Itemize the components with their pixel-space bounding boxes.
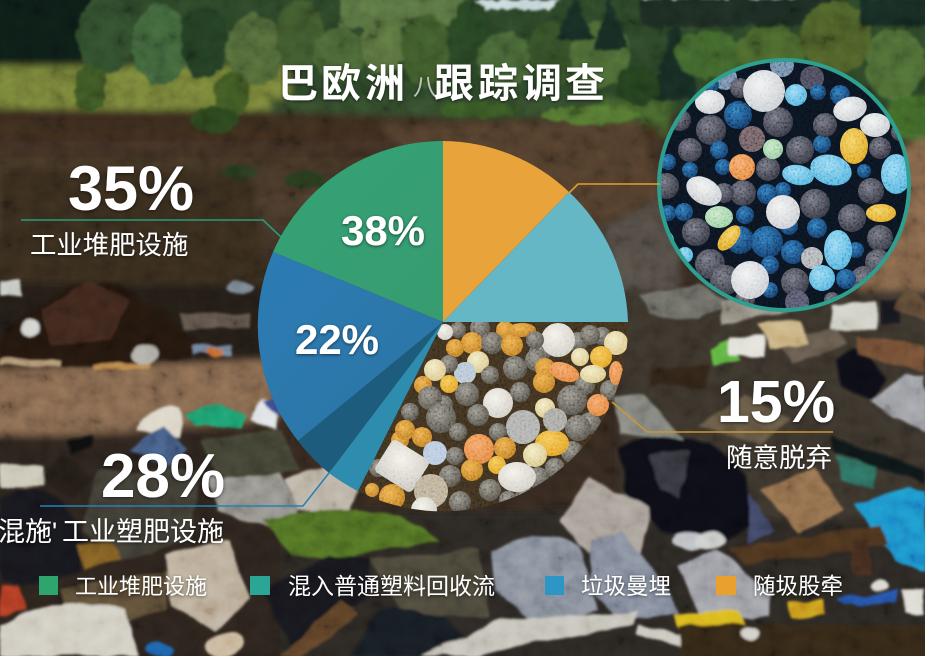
title: 巴欧洲跟踪调查 bbox=[278, 62, 605, 106]
callout: 35% industrial composting: 工业堆肥设施 bbox=[30, 230, 188, 260]
callout: 35% industrial composting: 35% bbox=[68, 154, 194, 224]
callout: 28% mixed facilities: 混施'工业塑肥设施 bbox=[0, 517, 224, 547]
pie label: 22%: 22% bbox=[295, 316, 379, 363]
pie chart bbox=[258, 141, 640, 523]
callout leader: orange slice to inset circle bbox=[569, 184, 660, 193]
callout: 15% random dumping: 随意脱弃 bbox=[726, 443, 832, 473]
pie slice: light teal bbox=[443, 192, 628, 322]
pie slice: 22% blue bbox=[258, 252, 443, 441]
background trash details bbox=[0, 280, 925, 656]
forest trees bbox=[74, 0, 925, 189]
legend item: dumping: 随圾股牵 bbox=[753, 574, 843, 599]
pie slice: micro-plastic pellet image wedge bbox=[358, 322, 628, 512]
title: 八 bbox=[413, 74, 437, 101]
legend item: industrial composting: 工业堆肥设施 bbox=[75, 574, 207, 599]
legend bbox=[39, 573, 843, 599]
pie slice: 38% green bbox=[273, 141, 443, 322]
callout: 28% mixed facilities bbox=[0, 442, 329, 547]
inset circle: micro-plastic pellets close-up bbox=[653, 53, 915, 315]
callout: 15% random dumping: 15% bbox=[717, 369, 835, 435]
pie slice: orange bbox=[443, 141, 569, 322]
callout: 28% mixed facilities: 28% bbox=[101, 442, 225, 511]
pie slice: blue-teal sliver bbox=[329, 322, 443, 491]
legend item: landfill: 垃圾曼埋 bbox=[581, 574, 671, 599]
callout: 15% random dumping bbox=[612, 369, 835, 473]
pie label: 38%: 38% bbox=[341, 207, 425, 254]
pie slice: dark blue bbox=[298, 322, 443, 473]
legend item: mixed recycling: 混入普通塑料回收流 bbox=[288, 573, 495, 599]
callout: 35% industrial composting bbox=[21, 154, 281, 260]
